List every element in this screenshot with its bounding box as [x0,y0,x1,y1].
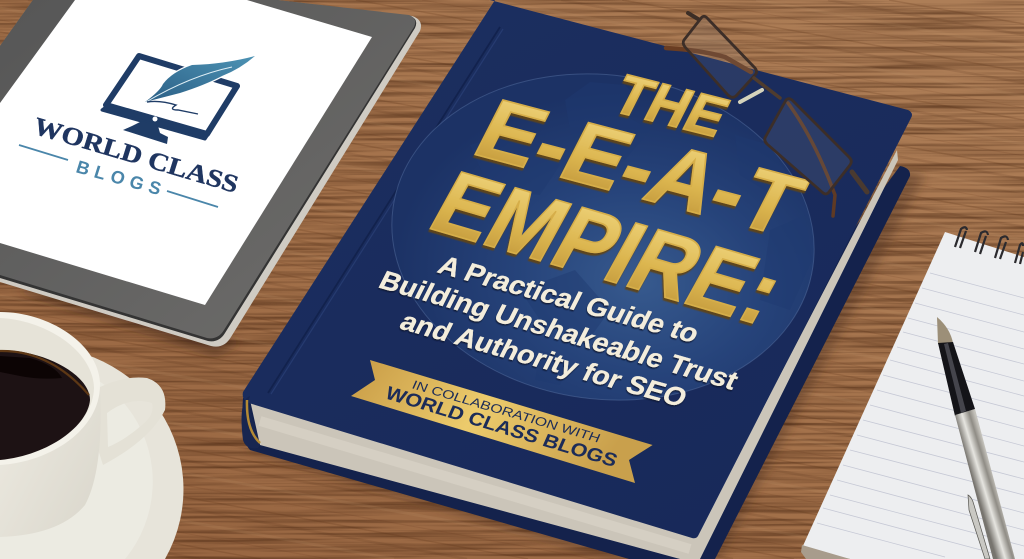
back cover [242,166,910,559]
spine [242,396,260,448]
glasses temple arms [666,13,867,216]
page block [250,150,898,559]
icon: feather [145,56,255,114]
tablet body [0,0,421,347]
coffee cup on saucer [0,312,183,559]
front cover [243,0,912,538]
globe emblem [371,47,835,427]
bridge [754,78,780,98]
globe continents [470,82,812,385]
logo: World Class Blogs [19,56,255,207]
book [242,0,925,559]
pen [937,317,1015,559]
subtitle line 1: A Practical Guide to [433,251,704,348]
nose pad [740,90,762,102]
coffee [0,350,90,460]
notebook pages [801,232,1024,559]
title line: E-E-A-T: E-E-A-T [461,81,820,253]
cup body [0,340,101,537]
subtitle line 2: Building Unshakeable Trust [374,266,743,395]
book shadow [245,170,925,559]
subtitle [374,251,743,412]
eyeglasses [666,13,867,216]
notebook spiral rings [955,227,1023,264]
collaboration ribbon [351,360,653,483]
left lens [683,16,756,97]
ribbon line 2: WORLD CLASS BLOGS [382,383,620,472]
logo sub-wordmark: BLOGS [74,157,164,199]
title line: EMPIRE: EMPIRE: [415,153,801,343]
tablet with logo [0,0,421,355]
saucer [0,347,183,559]
subtitle line 3: and Authority for SEO [395,307,692,412]
cup rim [0,312,100,465]
ribbon line 1: IN COLLABORATION WITH [410,378,603,445]
icon: monitor [102,56,237,144]
title line: THE: THE [603,64,739,149]
tablet screen [0,0,372,305]
logo wordmark: WORLD CLASS [30,113,242,199]
right lens [765,99,851,194]
title [415,64,820,343]
notebook with pen [801,227,1024,559]
cup handle [95,377,165,465]
